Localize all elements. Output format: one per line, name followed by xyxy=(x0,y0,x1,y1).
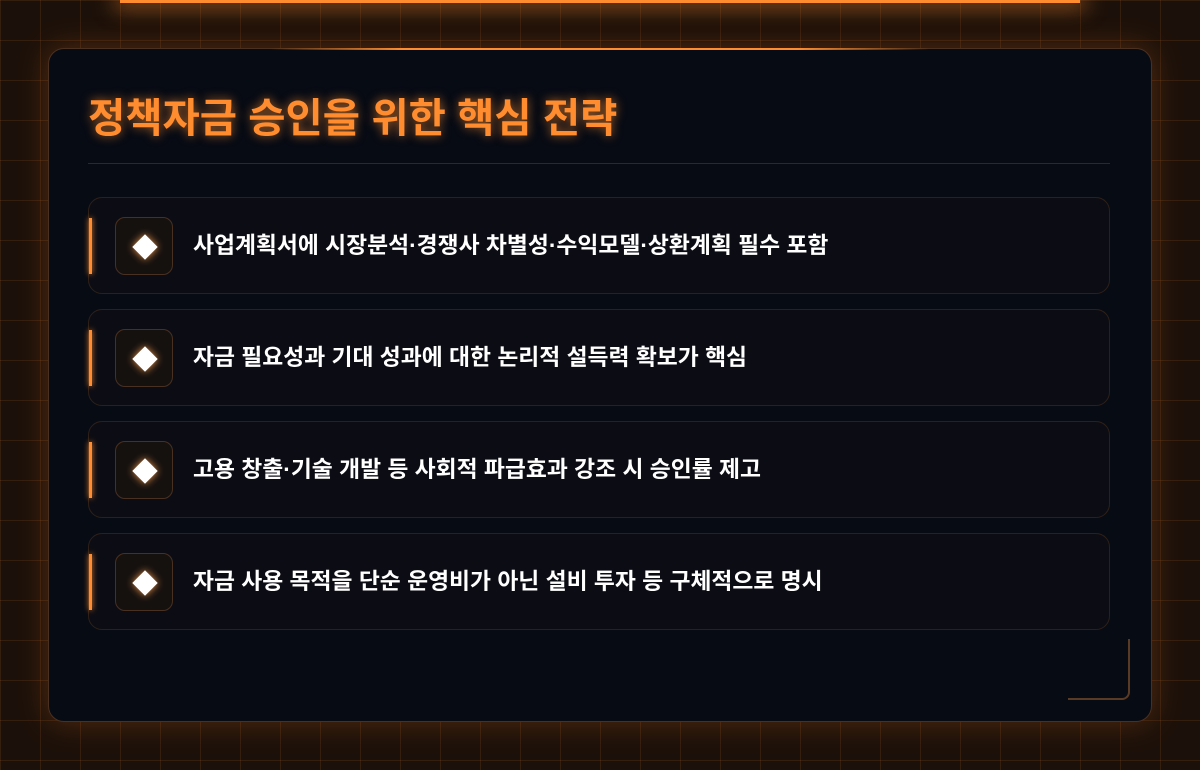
corner decoration xyxy=(1068,639,1130,700)
item 4: 자금 사용 목적을 단순 운영비가 아닌 설비 투자 등 구체적으로 명시 xyxy=(193,568,823,594)
item 1 xyxy=(88,197,1110,294)
item 3: 고용 창출·기술 개발 등 사회적 파급효과 강조 시 승인률 제고 xyxy=(193,456,761,482)
item 2 xyxy=(88,309,1110,406)
item 3 xyxy=(88,421,1110,518)
title: 정책자금 승인을 위한 핵심 전략 xyxy=(88,95,617,141)
item 1: 사업계획서에 시장분석·경쟁사 차별성·수익모델·상환계획 필수 포함 xyxy=(193,232,828,258)
item 2: 자금 필요성과 기대 성과에 대한 논리적 설득력 확보가 핵심 xyxy=(193,344,747,370)
item 4 xyxy=(88,533,1110,630)
